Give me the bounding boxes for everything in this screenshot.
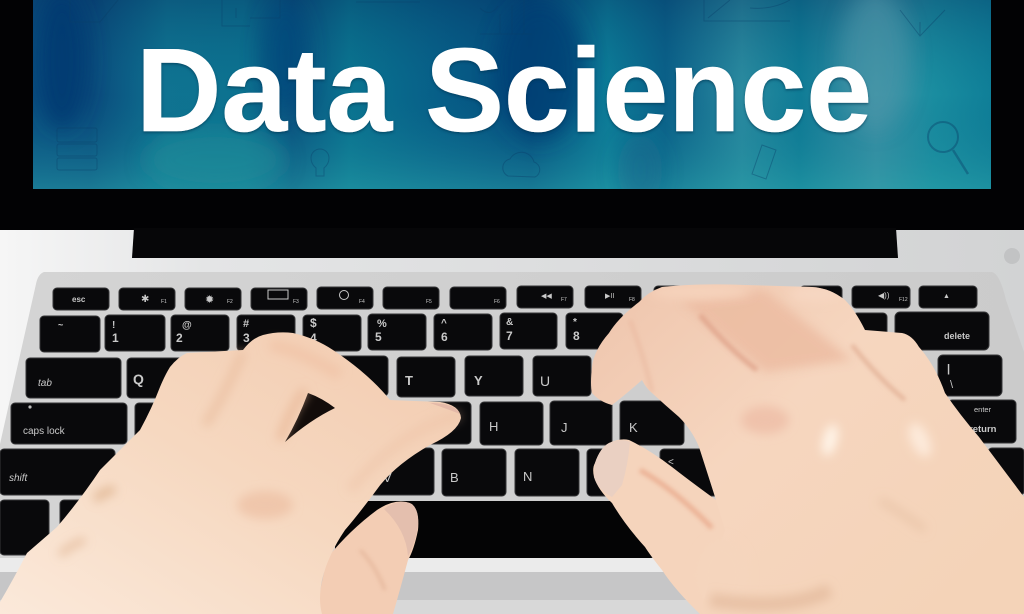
number key row: ^ — [441, 318, 447, 329]
function key row: F5 — [426, 299, 432, 305]
home key row — [11, 400, 1016, 445]
right thumb — [593, 439, 730, 614]
number key row: $ — [310, 316, 317, 330]
finger and knuckle modelling — [630, 285, 936, 604]
lid bezel — [0, 0, 1024, 232]
qwerty key row: Q — [133, 371, 144, 387]
number key row: 6 — [441, 330, 448, 344]
function key row: ✹ — [205, 294, 214, 306]
qwerty key row: Y — [474, 373, 483, 388]
function key row: F4 — [359, 299, 365, 305]
bottom letter row: V — [383, 470, 392, 485]
number key row: @ — [182, 320, 192, 331]
qwerty key row — [26, 355, 1002, 398]
home key row: caps lock — [23, 426, 66, 437]
left hand — [0, 332, 461, 614]
function key row: ▶II — [605, 293, 614, 300]
left hand shading — [60, 345, 460, 555]
index fingernail — [430, 403, 460, 414]
hinge — [132, 228, 898, 258]
qwerty key row: tab — [38, 378, 52, 389]
function key row: esc — [72, 295, 86, 304]
right hand back — [591, 284, 1024, 614]
keyboard — [0, 286, 1024, 558]
function key row: F1 — [161, 299, 167, 305]
qwerty key row: | — [947, 363, 950, 375]
laptop base — [0, 230, 1024, 614]
home key row: H — [489, 419, 498, 434]
number key row: 8 — [573, 329, 580, 343]
number key row: ! — [112, 320, 115, 331]
function key row: F12 — [899, 297, 908, 303]
power indicator — [1004, 248, 1020, 264]
faint screen icons — [57, 0, 968, 179]
number key row: % — [377, 318, 387, 330]
screen panel — [33, 0, 991, 205]
junction blend — [696, 539, 748, 611]
function key row: F7 — [561, 297, 567, 303]
number key row: 4 — [310, 331, 317, 345]
keyboard well — [0, 272, 1024, 560]
function key row: ◀◀ — [541, 293, 552, 300]
number key row: 7 — [506, 329, 513, 343]
bottom letter row: N — [523, 469, 532, 484]
function key row: F8 — [629, 297, 635, 303]
bottom letter row: < — [668, 457, 674, 468]
number key row: delete — [944, 331, 970, 341]
number key row: ~ — [58, 320, 63, 330]
number key row: 5 — [375, 330, 382, 344]
home key row: enter — [974, 405, 992, 414]
number key row: 1 — [112, 331, 119, 345]
function key row: F2 — [227, 299, 233, 305]
home key row: return — [969, 424, 997, 435]
left thumb — [317, 502, 418, 614]
function key row: ✱ — [141, 294, 149, 305]
number key row — [40, 312, 989, 352]
bottom letter row — [0, 448, 1024, 496]
function key row: ▲ — [943, 293, 950, 300]
left hand back — [0, 332, 461, 614]
function key row — [53, 286, 977, 310]
number key row: * — [573, 317, 577, 328]
qwerty key row: \ — [950, 379, 954, 391]
bottom letter row: B — [450, 470, 459, 485]
gap between fingers — [285, 393, 335, 442]
modifier keys and space bar — [0, 500, 655, 558]
function key row: F3 — [293, 299, 299, 305]
qwerty key row: T — [405, 373, 413, 388]
qwerty key row: U — [540, 373, 550, 389]
home key row: K — [629, 420, 638, 435]
number key row: 2 — [176, 331, 183, 345]
title: Data Science — [136, 24, 872, 157]
right hand — [591, 284, 1024, 614]
number key row: # — [243, 318, 249, 330]
palm rest — [0, 558, 1024, 614]
number key row: 3 — [243, 331, 250, 345]
bottom letter row: shift — [9, 473, 29, 484]
number key row: & — [506, 317, 513, 328]
function key row: F6 — [494, 299, 500, 305]
function key row: ◀)) — [878, 291, 890, 300]
home key row: J — [561, 420, 568, 435]
